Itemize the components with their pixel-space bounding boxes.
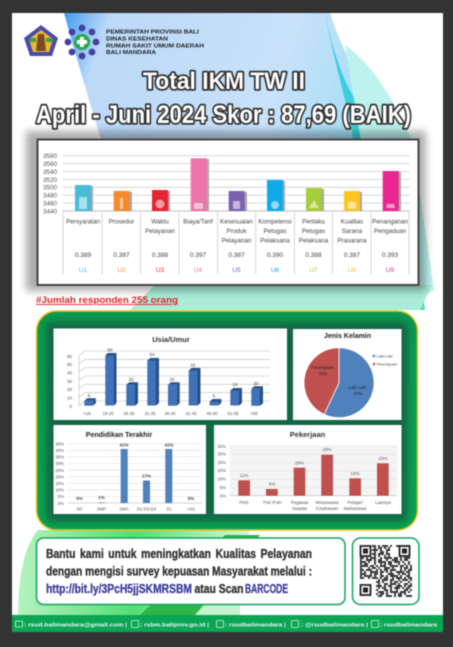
chart: education: 1% [98,495,105,500]
respondent note: #Jumlah responden 255 orang [36,295,178,305]
chart: occupation: 30% [217,444,226,449]
legend: Laki-Laki [376,354,393,358]
chart: occupation: /Usahawan [316,506,339,511]
y axis: 3560 [43,161,57,168]
y axis [43,153,57,216]
indicator codes [79,267,395,274]
y axis: 3580 [43,153,57,160]
chart: gender: Laki-Laki; [349,385,367,390]
chart: occupation: 20% [217,468,226,473]
chart: education: 0% [58,501,64,506]
chart: education: 0% [188,496,194,501]
age groups: 51-55 [228,411,239,416]
chart: occupation: 13% [350,471,360,476]
chart: education: SMP [97,506,106,512]
chart: education: 41% [164,442,174,448]
institution name [106,30,204,56]
bars [98,449,172,503]
chart: occupation: 30% [217,452,226,456]
legend: Perempuan [376,362,397,366]
chart: age: 0 [69,404,72,409]
y axis: 3520 [43,177,57,184]
chart: occupation: 5% [269,482,275,486]
chart: occupation: PNS [239,500,249,505]
footer contacts: : rsudbalimandara [380,622,438,628]
institution name: DINAS KESEHATAN [106,36,168,42]
score values: 0.387 [344,252,361,259]
score values: 0.388 [152,252,169,259]
footer contacts: : rsudbalimandara | [225,622,286,628]
footer icons [16,620,378,628]
chart: age: Usia/Umur [152,335,190,344]
age groups: >56 [250,411,258,416]
chart: occupation: 11% [240,473,248,478]
chart: occupation: 20% [295,460,304,466]
category labels: Penanganan [372,218,408,226]
y axis: 3440 [43,208,57,216]
chart: gender: Perempuan; [311,365,335,370]
chart: gender: 43% [319,371,327,376]
bar U9 [383,171,399,211]
y axis: 3540 [43,169,57,176]
category labels: Biaya/Tarif [183,218,213,226]
title: Total IKM TW II [143,68,305,95]
age groups [83,411,258,416]
chart: occupation: 0% [220,494,226,498]
callout: survey invitation [36,538,345,604]
category labels: Pelayanan [145,228,175,235]
chart: occupation: TNI/ Polri [263,500,281,505]
panel: IKM score chart [26,131,426,291]
chart: age: 20 [67,387,72,392]
chart: education: 30% [55,461,64,466]
footer contact bar [12,615,443,632]
header logos and institution [24,25,204,59]
footer contacts [24,622,438,628]
indicator codes: U8 [348,267,357,274]
category labels: Prosedur [109,218,134,226]
chart: occupation: Swasta [292,506,307,511]
bar icons [79,197,395,209]
chart: occupation: 29% [322,447,332,452]
chart: education: SMA [119,506,129,512]
y axis: 3460 [43,200,57,208]
age groups: 41-45 [186,411,197,416]
institution name: PEMERINTAH PROVINSI BALI [106,30,200,36]
footer contacts: : @rsudbalimandara | [301,622,368,628]
QR code [352,538,419,604]
chart: education: 41% [119,442,129,448]
category labels: Petugas [263,228,287,235]
chart: education: Pendidikan Terakhir [86,432,152,439]
chart: occupation: Mahasiswa [344,506,367,511]
values: 20 [253,381,259,386]
indicator codes: U2 [117,267,126,274]
chart: age [54,328,287,420]
chart: education: S1 [166,506,172,512]
bar U3 [152,190,168,211]
values: 54 [149,352,155,357]
score values: 0.389 [75,252,92,259]
chart: occupation [214,425,402,514]
callout: survey invitation: http://bit.ly/3PcH5jjSKMRSBM [46,582,192,596]
chart: education: 17% [142,474,151,478]
icon: Bali province crest [24,25,58,56]
values: 18 [232,382,238,387]
indicator codes: U4 [194,267,203,274]
chart: education: 10% [55,488,64,492]
category labels: Persyaratan [66,218,100,226]
category labels: Kualitas [341,218,363,226]
indicator codes: U3 [156,267,165,274]
age groups: 31-35 [144,411,156,416]
chart: age: 30 [67,379,72,384]
values: 6 [88,393,91,398]
pie: men [324,348,374,418]
chart: education: 25% [55,468,64,473]
values: 25 [128,377,134,382]
chart: occupation: 23% [378,456,388,461]
category labels: Waktu [151,218,169,226]
callout: survey invitation: Bantu kami untuk meningkatkan Kualitas Pelayanan [46,547,312,561]
score values: 0.390 [267,252,284,259]
footer contacts: : rsud.balimandara@gmail.com | [24,622,128,628]
footer contacts: : rsbm.baliprov.go.id | [140,622,210,628]
score values: 0.397 [190,252,207,259]
category labels: Pelaksana [299,238,329,244]
category labels: Kompetensi [258,218,292,226]
chart: occupation: Pelajar/ [347,500,363,505]
chart: education: 15% [55,481,64,486]
category labels: Perilaku [302,218,325,226]
category labels: Sarana [342,228,363,235]
score values: 0.387 [228,252,245,259]
bar U7 [306,188,322,211]
chart: education [54,425,206,514]
age groups: 19-25 [102,411,114,416]
chart: occupation: Pekerjaan [290,430,326,439]
category labels: Produk [227,228,247,235]
chart: occupation: 25% [217,460,226,465]
category labels: Pelaksana [260,238,290,244]
chart: education: 0% [76,496,83,501]
chart: gender: 57% [354,391,362,396]
indicator codes: U5 [232,267,241,274]
score values: 0.388 [305,252,322,259]
indicator codes: U7 [309,267,318,274]
chart: education: 45% [55,442,64,446]
age groups: <18 [83,411,91,416]
values [88,348,259,398]
pie: women [304,348,339,414]
chart: occupation: Wiraswasta [315,500,339,505]
y axis: 3500 [43,185,57,192]
bar U5 [229,191,245,211]
chart: occupation: Lainnya [375,500,391,505]
chart: age: 10 [67,396,72,400]
category labels: Prasarana [337,238,367,244]
chart: gender: Jenis Kelamin [324,333,371,340]
score values [75,252,399,259]
age groups: 26-30 [124,411,135,416]
bars [84,353,263,406]
score values: 0.387 [113,252,130,259]
chart: education: >S2 [187,506,195,512]
institution name: BALI MANDARA [106,50,156,56]
indicator codes: U1 [79,267,88,274]
title [36,68,411,129]
bars [238,455,389,496]
indicator codes: U9 [386,267,395,274]
chart: education: D1-D3-D4 [137,506,157,512]
chart: age: 60 [67,354,72,359]
chart: gender [293,329,402,420]
category labels: Kesesuaian [220,218,253,226]
category labels [66,218,408,244]
chart: occupation: Pegawai [291,500,308,505]
chart: age: 40 [67,370,72,376]
chart: education: 40% [55,448,64,453]
chart: education: SD [77,506,82,512]
category labels: Pelayanan [222,238,252,244]
bars with shadows [77,159,401,211]
chart: education: 20% [55,474,64,480]
bar U4 [191,158,207,211]
chart: age: 50 [67,362,72,367]
y axis: 3480 [43,192,57,200]
indicator codes: U6 [271,267,280,274]
age groups: 46-50 [206,411,218,416]
bar U8 [344,191,360,211]
legend [373,354,397,366]
chart: occupation: 15% [217,476,226,482]
icon: hospital emblem [65,25,99,59]
callout: survey invitation: BARCODE [245,582,288,596]
chart: occupation: 5% [220,485,226,490]
bar U6 [267,180,283,211]
values: 5 [213,394,216,398]
panel: respondent demographics [36,311,418,530]
institution name: RUMAH SAKIT UMUM DAERAH [106,44,204,50]
bar U2 [114,191,130,211]
values: 25 [169,377,175,382]
category labels: Pengaduan [374,228,407,235]
chart: education: 5% [58,494,64,499]
callout: survey invitation: atau Scan [194,582,244,596]
chart: education: 35% [55,454,64,460]
title: April - Juni 2024 Skor : 87,69 (BAIK) [36,101,411,129]
callout: survey invitation: dengan mengisi survey kepuasan Masyarakat melalui : [46,564,312,578]
age groups: 36-40 [164,411,176,416]
values: 42 [190,362,196,368]
bar U1 [75,185,91,211]
category labels: Petugas [302,228,325,235]
values: 60 [107,348,113,352]
score values: 0.393 [382,252,399,259]
